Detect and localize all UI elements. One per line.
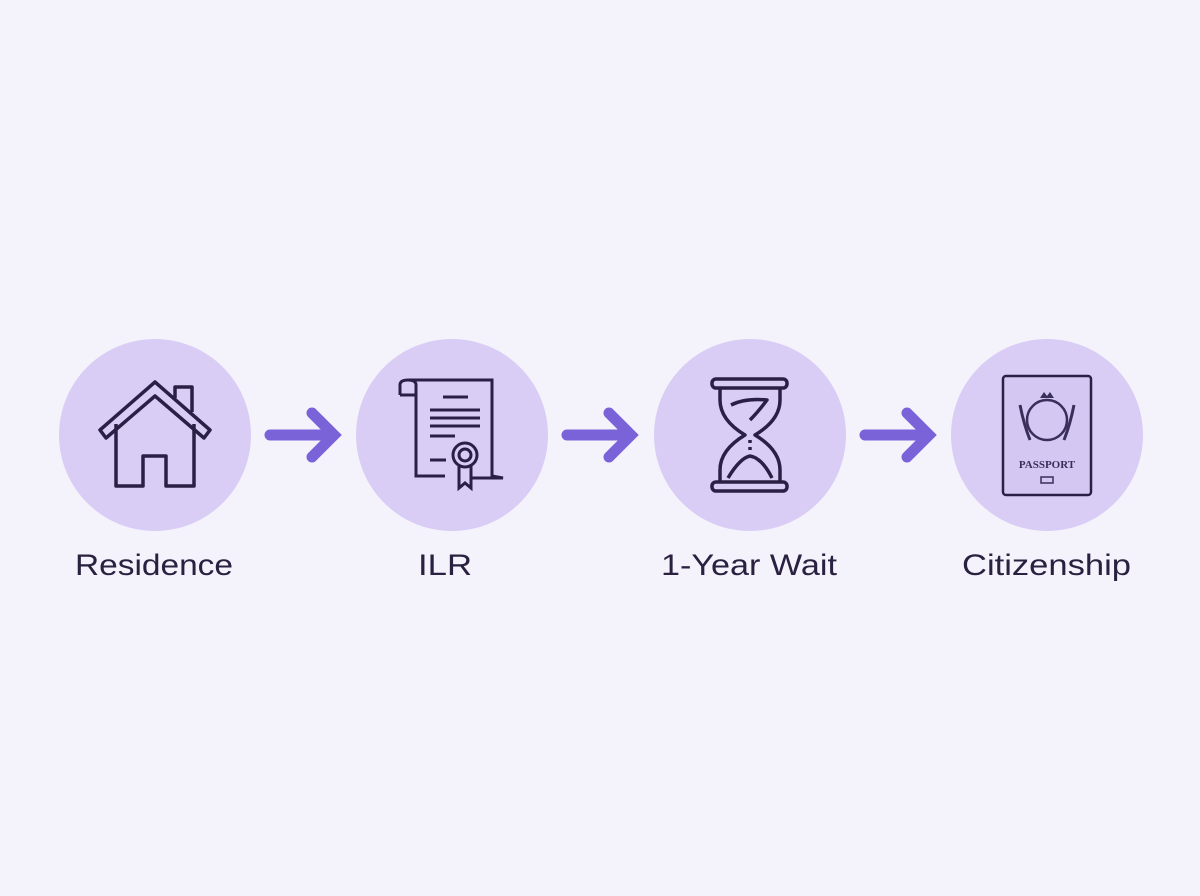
circle: residence [59, 339, 251, 531]
step: ILR [356, 339, 548, 582]
label: citizenship: Citizenship [962, 549, 1131, 582]
icon: certificate [400, 380, 503, 488]
icon: house [100, 382, 210, 486]
label: residence: Residence [75, 549, 233, 582]
step: citizenship [951, 339, 1143, 582]
label: wait: 1-Year Wait [661, 549, 838, 582]
arrow 2 [567, 413, 631, 457]
label: ILR: ILR [418, 549, 472, 582]
icon: hourglass [712, 379, 787, 491]
arrow 3 [865, 413, 929, 457]
circle: wait [654, 339, 846, 531]
icon: passport: PASSPORT [1019, 459, 1076, 471]
step: residence [59, 339, 251, 582]
step: 1-year wait [654, 339, 846, 582]
arrow 1 [270, 413, 334, 457]
icon: passport [1003, 376, 1091, 495]
circle: citizenship [951, 339, 1143, 531]
circle: ILR [356, 339, 548, 531]
